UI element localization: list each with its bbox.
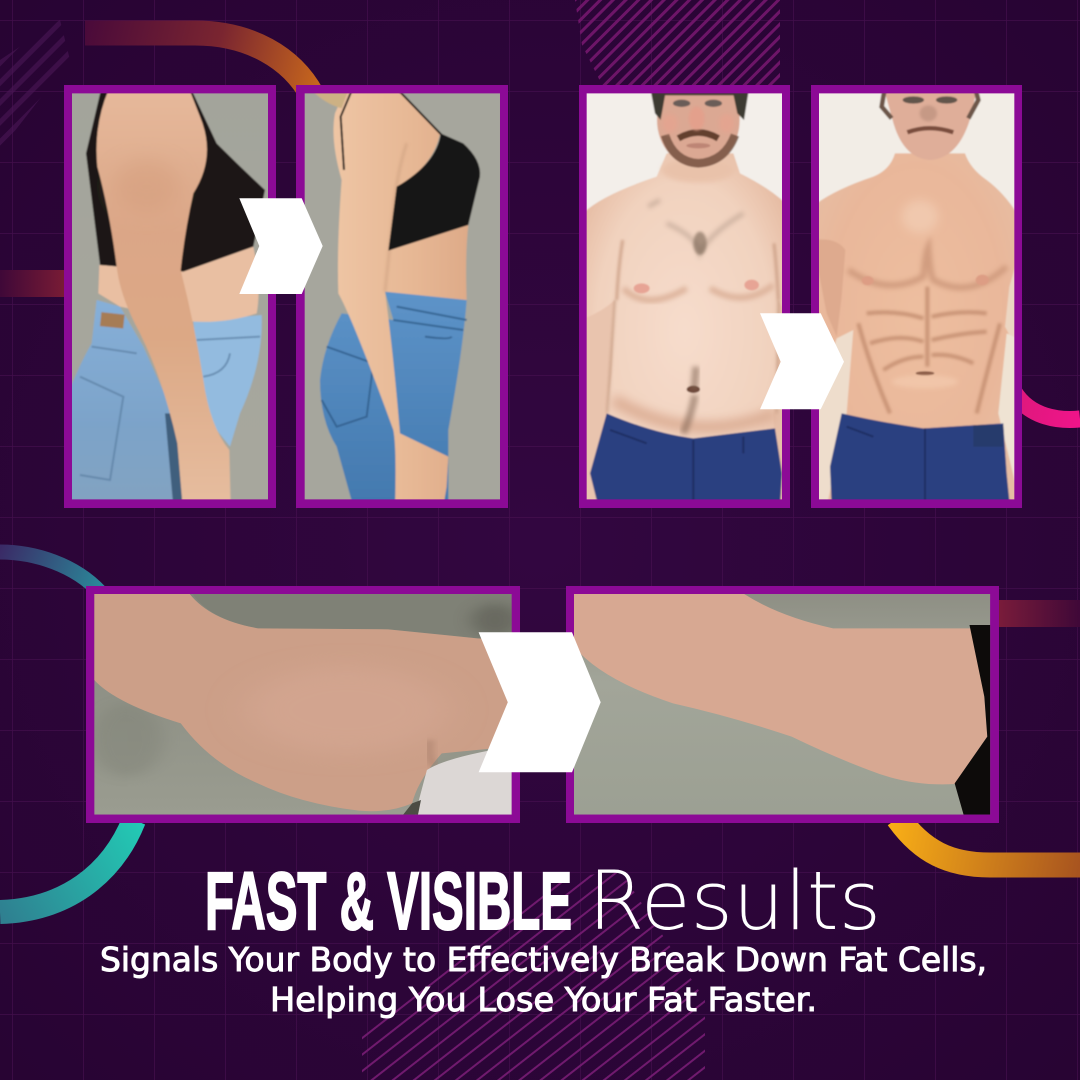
arrow: arm comparison	[479, 632, 601, 772]
panel: arm before	[86, 586, 520, 823]
panel: man before	[579, 73, 790, 508]
arc: right pink	[1014, 392, 1080, 420]
arc: left teal lower	[0, 820, 134, 912]
bar: right dark red	[998, 600, 1080, 627]
subtitle: Helping You Lose Your Fat Faster.	[270, 980, 817, 1019]
panel: woman after	[296, 85, 508, 508]
bar: left dark red	[0, 270, 66, 297]
title: Results	[588, 855, 881, 949]
panel: man after	[811, 85, 1022, 508]
title: FAST & VISIBLE	[205, 856, 572, 947]
arrow: man comparison	[760, 313, 844, 409]
arc: bottom right orange	[898, 818, 1080, 865]
arc: top left orange	[85, 33, 312, 95]
arrow: woman comparison	[239, 198, 323, 294]
panel: woman before	[64, 85, 276, 508]
subtitle	[100, 940, 987, 1019]
arc: left teal upper	[0, 552, 100, 592]
subtitle: Signals Your Body to Effectively Break Down Fat Cells,	[100, 940, 987, 979]
panel: arm after	[566, 586, 999, 823]
